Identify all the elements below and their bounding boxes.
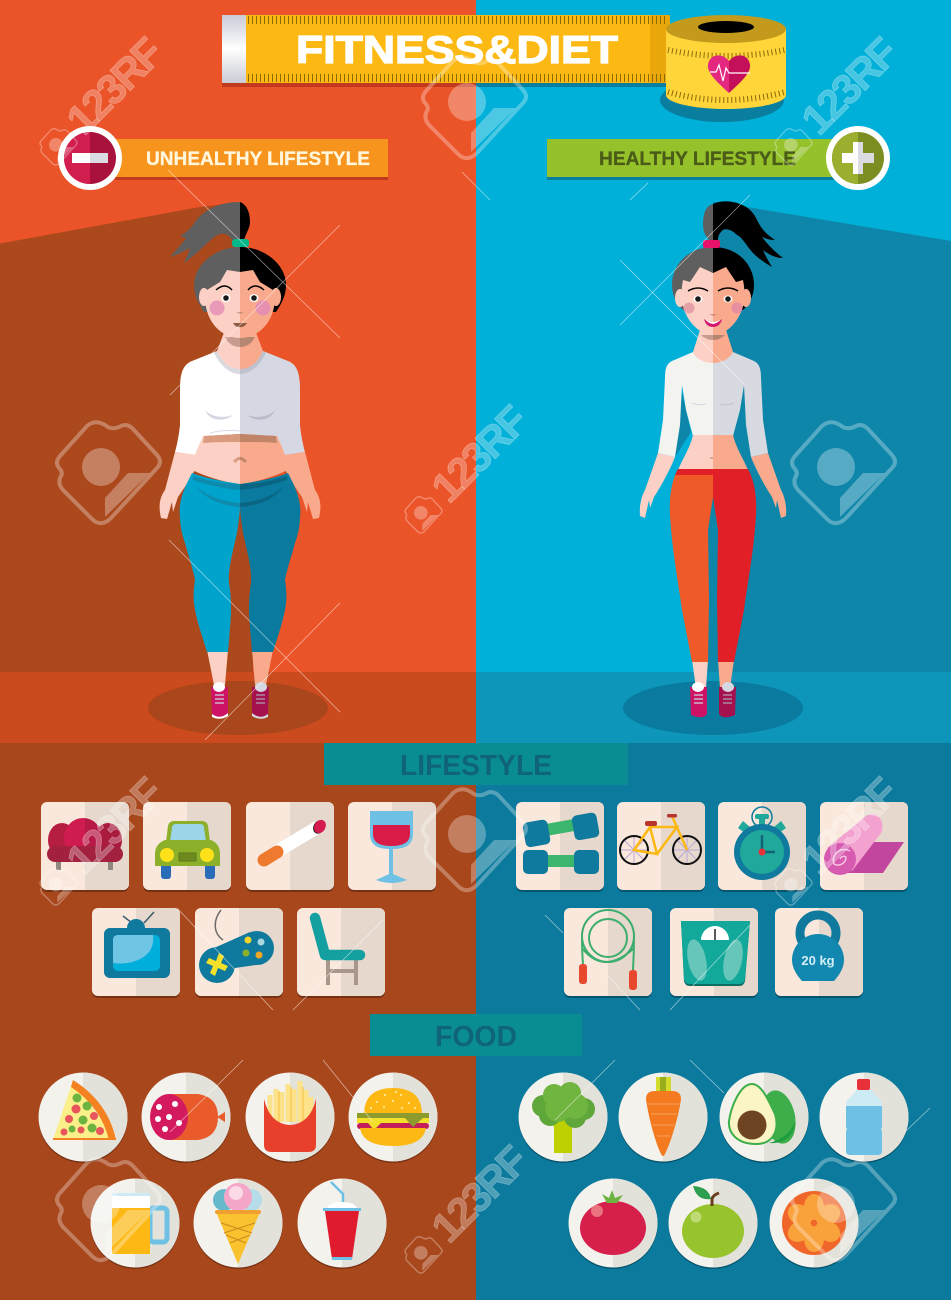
hair band [232,239,249,247]
hair band [703,240,720,248]
background: unhealthy side [0,0,476,1300]
heading: lifestyle: LIFESTYLE [400,750,552,782]
heading: lifestyle [324,743,628,785]
icon: car [143,802,231,892]
badge: unhealthy lifestyle [58,126,388,190]
heading: food: FOOD [435,1021,517,1053]
icon: cigarette [246,802,334,892]
badge: healthy lifestyle [547,126,890,190]
icon: pizza [38,1072,128,1163]
title banner: measuring tape [222,15,670,87]
tape roll with heart [660,15,786,122]
icon: dumbbells [516,802,604,892]
panel: healthy lifestyle icons [516,802,908,998]
icon: salami [142,1072,230,1163]
icon: plus [826,126,890,190]
watermark overlay: 123RF [792,768,907,883]
heading: food [370,1014,582,1056]
panel: unhealthy food icons [38,1072,438,1269]
icon: tomato [568,1178,658,1269]
icon: wine glass [348,802,436,892]
watermark overlay: 123RF [57,28,172,143]
panel: healthy food icons [518,1072,908,1269]
background: healthy side [476,0,951,1300]
watermark overlay: 123RF [792,28,907,143]
icon: kettlebell: 20 kg [801,953,835,968]
icon: minus [58,126,122,190]
watermark overlay: 123RF [57,768,172,883]
panel: unhealthy lifestyle icons [41,802,436,998]
icon: stopwatch [718,802,806,892]
figure right half [240,202,320,719]
icon: burger [348,1072,438,1163]
figure left half [640,204,713,717]
badge: unhealthy lifestyle: UNHEALTHY LIFESTYLE [146,149,370,170]
figure: unhealthy woman [160,202,320,719]
icon: apple [668,1178,758,1269]
icon: couch [41,802,129,892]
icon: french fries [246,1072,334,1163]
icon: orange slice [770,1178,858,1269]
icon: bathroom scale [670,908,758,998]
icon: game controller [195,908,283,998]
icon: yoga mat [820,802,908,892]
title text: FITNESS&DIET [296,29,618,72]
icon: avocado [720,1072,808,1163]
icon: soda cup [298,1178,386,1269]
icon: bicycle [617,802,705,892]
watermark overlay: 123RF [422,1136,537,1251]
icon: ice cream [194,1178,282,1269]
icon: tv [92,908,180,998]
icon: chair [297,908,385,998]
watermark overlay: 123RF [422,396,537,511]
icon: broccoli [518,1072,608,1163]
ponytail [713,201,783,267]
badge: healthy lifestyle: HEALTHY LIFESTYLE [599,149,796,170]
icon: jump rope [564,908,652,998]
icon: beer mug [90,1178,180,1269]
figure: healthy woman [640,201,786,717]
icon: kettlebell [775,908,863,998]
figure left half [160,202,240,719]
icon: carrot [618,1072,708,1163]
figure right half [713,247,786,717]
icon: water bottle [820,1072,908,1163]
